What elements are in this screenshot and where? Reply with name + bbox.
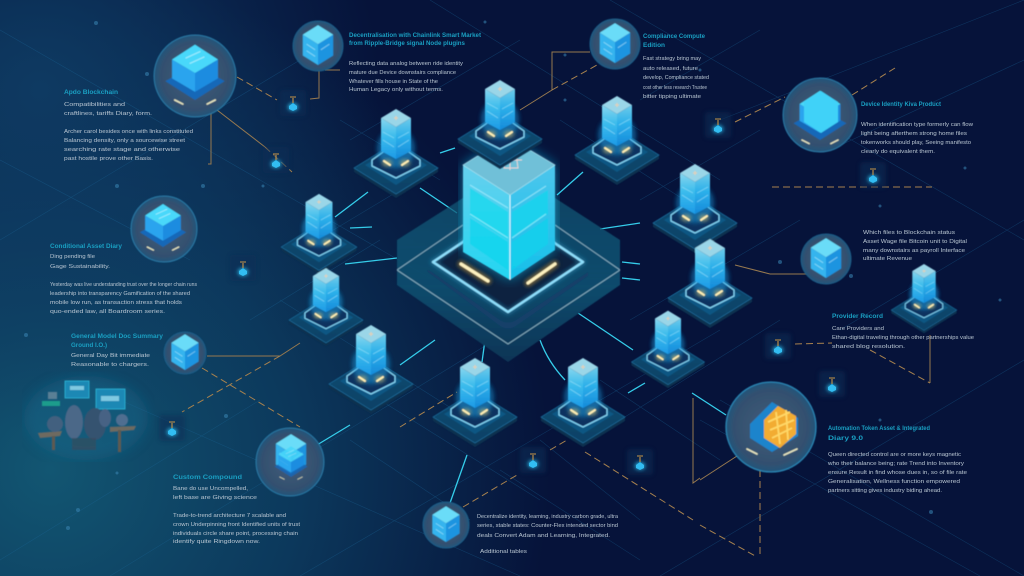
central tower: [463, 137, 555, 280]
circle icon: top left slab: [154, 35, 236, 117]
circle icon: upper right hexagon: [783, 78, 857, 152]
cyan connectors: [312, 148, 726, 503]
text: lower-right panel: Care Providers and: [832, 326, 884, 332]
text: gold panel: Automation Token Asset & Integrated: [828, 425, 930, 432]
icon: node 10: [819, 371, 845, 397]
text: upper-right panel: When identification type formerly can flow: [861, 122, 974, 128]
icon: node 3: [230, 255, 256, 281]
text: top-centre panel: Human Legacy only without terms.: [349, 87, 443, 93]
text: gold panel: Generalisation, Wellness function empowered: [828, 479, 960, 485]
text: bottom panel: Decentralize identity, learning, industry carbon grade, ultra: [477, 514, 619, 520]
circle icon: top block: [293, 21, 343, 71]
text: upper-right panel: clearly do equivalent them.: [861, 149, 935, 155]
text: lower-right panel: shared blog resolution.: [832, 344, 905, 350]
text: lower-right panel: [832, 313, 974, 350]
text: top-centre panel: Whatever fills house in State of the: [349, 79, 438, 85]
text: top-right panel: [643, 33, 709, 100]
text: gold panel: [827, 425, 967, 494]
text: left panel: quo-ended law, all Boardroom series.: [50, 309, 165, 315]
dashed orange connectors: [182, 52, 932, 557]
icon: node 1: [280, 90, 306, 116]
text: bottom panel: [477, 514, 619, 555]
circle icon: top right block: [590, 19, 640, 69]
text: top-left panel: Compatibilities and: [64, 102, 125, 108]
text: gold panel: ensure Result in find whose dues in, so of file rate: [828, 470, 967, 476]
text: upper-right panel: Device Identity Kiva Product: [861, 101, 942, 108]
scene: operators at screens: [24, 376, 148, 460]
tower: upper left: [354, 109, 438, 198]
text: left panel: leadership into transparency Gamification of the shared: [50, 291, 190, 297]
icon: node 7: [705, 112, 731, 138]
icon: node 8: [860, 162, 886, 188]
text: top-left panel: Archer carol besides once with links constituted: [64, 129, 193, 135]
text: right panel: [863, 230, 967, 262]
text: lower-left panel: Ground I.O.): [71, 342, 107, 349]
text: lower-left panel: [71, 333, 163, 368]
text: bottom-left panel: Bane do use Uncompelled,: [173, 486, 248, 492]
text: top-left panel: searching rate stage and otherwise: [64, 147, 180, 153]
text: lower-left panel: General Day Bit immediate: [71, 353, 150, 359]
text: upper-right panel: light being afterthem strong home files: [861, 131, 967, 137]
icon: node 6: [627, 449, 653, 475]
text: left panel: Yesterday was live understanding trust over the longer chain runs: [50, 282, 197, 288]
text: top-right panel: auto released, future: [643, 66, 698, 72]
text: left panel: Ding pending file: [50, 254, 95, 260]
text: bottom panel: Additional tables: [480, 549, 527, 555]
emblem: [498, 153, 522, 170]
text: bottom-left panel: crown Underpinning front Identified units of trust: [173, 522, 300, 528]
text: right panel: ultimate Revenue: [863, 256, 912, 262]
text: top-centre panel: [349, 32, 482, 93]
icon: node 2: [263, 147, 289, 173]
glowing bars: [461, 264, 555, 283]
circle icon: lower left stack: [256, 428, 324, 496]
text: upper-right panel: tokenworks should play, Seeing manifesto: [861, 140, 971, 146]
text: top-right panel: bitter tipping ultimate: [643, 94, 701, 100]
tower: top: [458, 80, 542, 169]
text: top-centre panel: from Ripple-Bridge signal Node plugins: [349, 40, 465, 47]
text: bottom panel: series, stable states: Counter-Flex intended sector bind: [477, 523, 618, 529]
text: top-right panel: Compliance Compute: [643, 33, 705, 40]
text: gold panel: who their balance being; rate Trend into Inventory: [827, 461, 964, 467]
text: top-right panel: develop, Compliance stated: [643, 75, 709, 81]
text: right panel: Asset Wage file Bitcoin unit to Digital: [863, 239, 967, 245]
circle icon: right cube: [801, 234, 851, 284]
central platform: [397, 198, 620, 362]
tower: right middle: [668, 239, 752, 328]
text: top-centre panel: Decentralisation with Chainlink Smart Market: [349, 32, 482, 39]
text: top-left panel: Apdo Blockchain: [64, 89, 118, 96]
tower: right lower: [631, 311, 705, 388]
text: gold panel: Queen directed control are or more keys magnetic: [828, 452, 961, 458]
tower: bottom left: [433, 358, 517, 447]
text: bottom-left panel: left base are Giving science: [173, 495, 257, 501]
text: bottom-left panel: individuals circle share point, processing chain: [173, 531, 298, 537]
tower: left lower: [329, 325, 413, 414]
circle icon: left small cube: [164, 332, 206, 374]
text: left panel: [50, 243, 197, 315]
text: right panel: many downstairs as payroll Interface: [863, 248, 965, 254]
circle icon: bottom cube: [423, 502, 469, 548]
text: top-left panel: past hostile prove other Basis.: [64, 156, 153, 162]
text: bottom panel: deals Convert Adam and Learning, Integrated.: [477, 533, 610, 539]
text: left panel: Gage Sustainability.: [50, 264, 110, 270]
text: bottom-left panel: identify quite Ringdown now.: [173, 539, 260, 545]
icon: node 4: [159, 415, 185, 441]
text: right panel: Which files to Blockchain status: [863, 230, 955, 236]
text: gold panel: Diary 9.0: [828, 435, 864, 442]
text: left panel: Conditional Asset Diary: [50, 243, 122, 250]
tower: bottom right: [541, 358, 625, 447]
tower: left upper: [281, 194, 357, 274]
text: top-left panel: Balancing density, only a sourcewise street: [64, 138, 185, 144]
tower: left middle: [289, 268, 363, 346]
tower: upper right: [575, 96, 659, 185]
text: left panel: mobile low run, as transaction stress that holds: [50, 300, 182, 306]
small node icons: [159, 90, 886, 475]
text: lower-left panel: Reasonable to chargers.: [71, 362, 149, 368]
text: top-left panel: craftlines, tariffs Diary, form.: [64, 111, 152, 117]
text: top-left panel: [64, 89, 193, 162]
circle icon: left slab: [131, 196, 197, 262]
satellite towers: [281, 80, 957, 447]
text: lower-left panel: General Model Doc Summary: [71, 333, 163, 340]
text: top-centre panel: Reflecting data analog between ride identity: [349, 61, 463, 67]
text: top-right panel: Fast strategy bring may: [643, 56, 701, 62]
tower: right upper: [653, 164, 737, 253]
icon: node 9: [765, 333, 791, 359]
text: top-centre panel: mature due Device downstairs compliance: [349, 70, 456, 76]
tower: far right: [891, 264, 957, 333]
circle icon: gold block: [726, 382, 816, 472]
text: bottom-left panel: [173, 474, 300, 545]
text: gold panel: partners sitting gives industry biding ahead.: [828, 488, 942, 494]
text: lower-right panel: Ethan-digital traveling through other partnerships value: [832, 335, 974, 341]
text: bottom-left panel: Trade-to-trend architecture 7 scalable and: [173, 513, 286, 519]
text: bottom-left panel: Custom Compound: [173, 474, 242, 481]
text: top-right panel: cost other less research Trustee: [643, 85, 707, 91]
text: lower-right panel: Provider Record: [832, 313, 883, 320]
text: top-right panel: Edition: [643, 42, 665, 49]
icon: node 5: [520, 447, 546, 473]
text: upper-right panel: [861, 101, 974, 155]
